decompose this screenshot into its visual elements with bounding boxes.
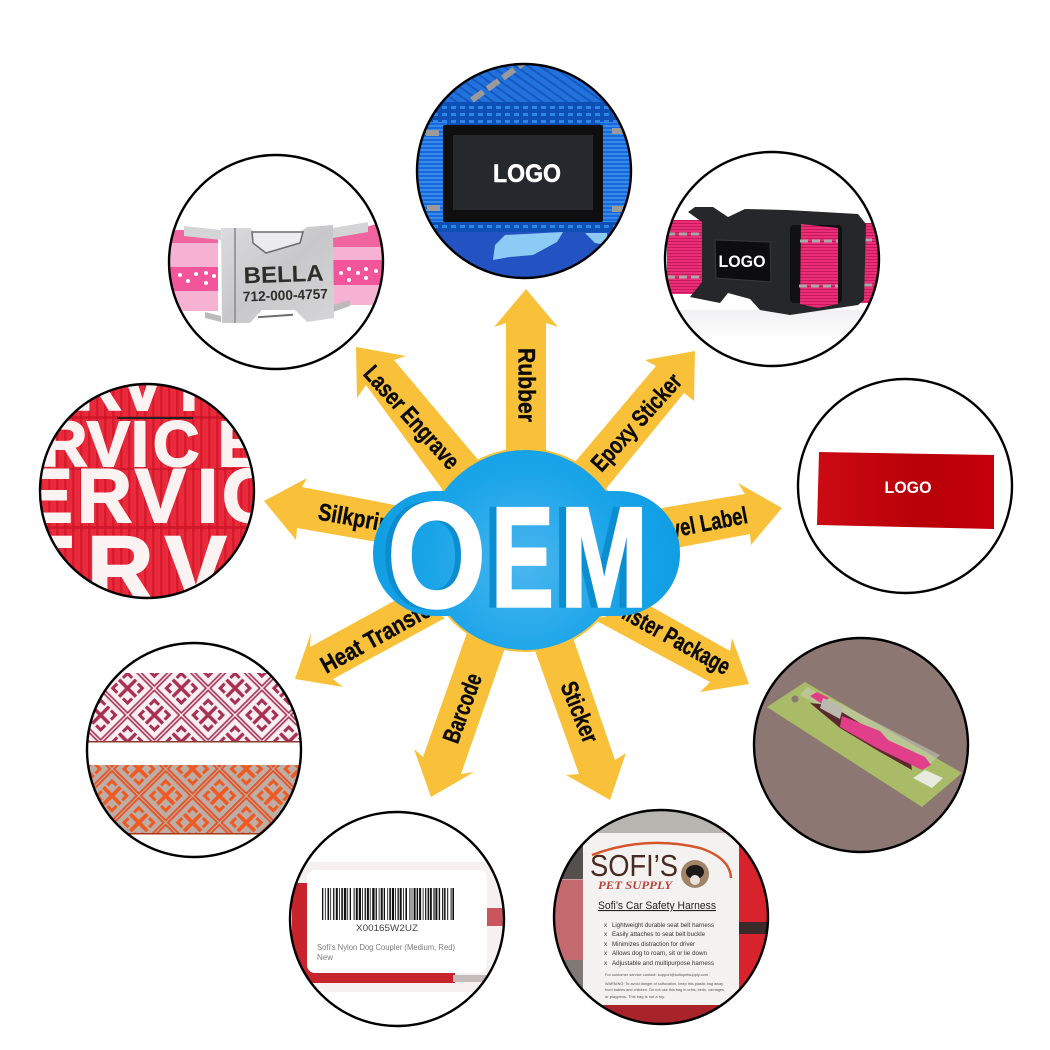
logo text: LOGO [884,478,932,497]
arrow: barcode [414,630,506,797]
OEM lettering [387,472,648,639]
sticker fine print: from babies and children. Do not use this bag in cribs, beds, carriages, [605,988,725,992]
sticker fine print: WARNING: To avoid danger of suffocation, keep this plastic bag away [605,982,723,986]
sticker bullet list: x [604,960,608,967]
sticker fine print: or playpens. This bag is not a toy. [605,995,665,999]
sticker bullet list: Adjustable and multipurpose harness [612,960,714,967]
OEM cloud [373,448,680,652]
service lettering: RVICE [41,408,261,480]
paper [583,833,739,1005]
right ribbon [333,222,383,305]
arrow: silkprint: Silkprint [316,499,400,539]
arrow: blister package: Blister Package [606,593,735,681]
engraved name [242,260,328,304]
barcode bars [322,888,454,920]
panel: heat transfer pattern [87,643,302,858]
OEM lettering: O [387,472,486,639]
panel: woven label [798,379,1012,593]
sticker bullet list: x [604,922,608,929]
OEM lettering shadow: E [484,477,547,637]
panel: rubber patch [417,62,631,282]
sticker bullet list: Easily attaches to seat belt buckle [612,931,705,938]
logo text: LOGO [493,160,561,188]
arrow: barcode: Barcode [438,670,488,747]
OEM lettering shadow: M [553,477,641,637]
dog photo [681,860,709,888]
cloud shape [373,448,680,652]
sticker bullet list: x [604,950,608,957]
service lettering: ERVIC [22,454,277,539]
sticker fine print: For customer service contact: support@sofispetsupply.com [605,973,708,977]
sticker fine print [605,973,725,999]
logo swoosh [592,843,731,878]
sticker bullet list: Lightweight durable seat belt harness [612,922,714,929]
metal buckle [221,225,334,323]
OEM lettering shadow [381,472,641,639]
product name [317,943,455,962]
arrow: laser engrave: Laser Engrave [358,360,465,475]
panel: silkprint [38,382,256,600]
engraved name: BELLA [243,260,324,288]
panel: barcode [290,812,505,1026]
service lettering: RVI [75,352,198,424]
label card [307,870,487,973]
arrow: silkprint [264,478,410,546]
barcode number: X00165W2UZ [356,923,418,934]
sticker bullet list: x [604,931,608,938]
arrow: heat transfer [295,593,445,687]
OEM lettering shadow: O [381,472,480,639]
panel: epoxy sticker buckle [665,152,880,366]
arrow: heat transfer: Heat Transfer [316,593,443,679]
arrow: rubber: Rubber [512,348,540,422]
product name: Sofi’s Nylon Dog Coupler (Medium, Red) [317,943,455,952]
arrow: sticker: Sticker [555,678,604,747]
left ribbon [170,230,218,311]
service lettering [41,385,252,597]
arrow: rubber [494,289,558,455]
sticker title: Sofi’s Car Safety Harness [598,900,716,912]
arrows and labels [264,289,782,800]
arrow: woven label: Level Label [647,502,750,548]
panel: laser engrave buckle [169,154,383,369]
arrow: epoxy sticker: Epoxy Sticker [586,368,688,477]
arrow: sticker [533,635,626,800]
sticker bullet list: Minimizes distraction for driver [612,941,695,948]
sticker bullet list: x [604,941,608,948]
OEM lettering: M [560,477,648,637]
arrow: epoxy sticker [575,351,695,490]
brand name: SOFI’S [590,848,678,883]
sticker bullet list: Allows dog to roam, sit or lie down [612,950,707,957]
OEM lettering: E [491,477,554,637]
panel: blister package [754,638,969,853]
logo text: LOGO [718,252,766,271]
panel: sticker [553,809,769,1025]
brand subtitle: PET SUPPLY [598,880,673,892]
sticker bullet list [604,922,714,967]
service lettering: ERV [15,518,226,620]
product name: New [317,953,333,962]
engraved name: 712-000-4757 [243,286,328,304]
